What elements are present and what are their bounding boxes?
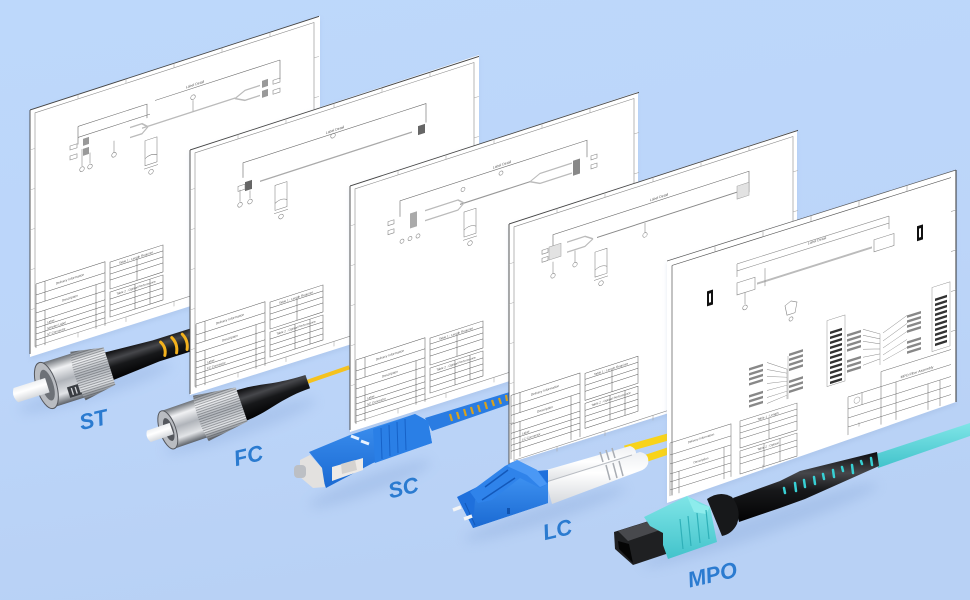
connector: LC <box>453 437 668 549</box>
drawing sheet: MPO: Description <box>694 456 709 465</box>
black striped pin columns <box>830 295 947 384</box>
window <box>332 458 363 481</box>
label: SC: SC <box>386 472 422 503</box>
drawing sheet: FC: Table 2 : Optical Performance <box>276 319 316 336</box>
fiber cable schematic: MPO <box>737 214 894 338</box>
drawing sheet: LC: Description <box>537 405 553 414</box>
drawing sheet: MPO: Table 1 : Length <box>757 411 779 422</box>
drawing sheet: SC <box>350 92 639 435</box>
drawing sheet: SC: Table 2 : Optical Performance <box>436 355 476 372</box>
drawing sheet: FC: Description <box>222 333 238 343</box>
knurled nut <box>191 382 249 442</box>
drawing sheet: LC: Label <box>522 429 530 436</box>
black front housing <box>614 520 672 565</box>
drawing sheet: SC: Delivery Information <box>376 348 404 362</box>
white boots <box>543 446 636 486</box>
drawing sheet: LC: Label Detail <box>650 192 668 202</box>
strain relief with yellow ridges <box>425 392 510 431</box>
end-face icons <box>707 290 713 306</box>
label: LC: LC <box>540 514 575 545</box>
drawing sheet: ST: Label Detail <box>186 80 204 90</box>
metal barrel <box>159 398 212 449</box>
title block <box>670 350 951 496</box>
white ferrule <box>11 378 50 403</box>
fiber cable schematic: ST <box>70 60 280 175</box>
drawing sheet: LC <box>509 130 798 468</box>
connector: FC <box>139 345 357 462</box>
drawing sheet: MPO: MPO Fiber Assembly <box>901 365 934 379</box>
drawing sheet: ST: ST Connector <box>47 327 65 336</box>
white marks <box>351 436 369 444</box>
blue body <box>457 470 548 528</box>
drawing sheet: MPO <box>667 170 956 506</box>
fiber cable schematic: LC <box>542 171 749 282</box>
fiber cable schematic: SC <box>388 137 597 248</box>
label: ST: ST <box>77 404 111 435</box>
knurled nut <box>67 342 117 401</box>
drawing sheet: ST: Table 1 : Length Requires <box>119 250 153 265</box>
blue housing <box>309 414 432 488</box>
drawing sheet: FC: Label <box>207 358 215 364</box>
drawing sheet: ST: Label <box>47 318 55 324</box>
drawing sheet: SC: SC Connector <box>367 396 386 406</box>
drawing sheet: ST: Description <box>62 293 78 303</box>
fiber cable schematic: FC <box>238 103 426 208</box>
front post <box>294 465 306 478</box>
drawing sheet: SC: Table 1 : Length Requires <box>439 326 473 341</box>
white ferrule <box>145 423 174 443</box>
black boot <box>233 367 313 422</box>
teal fiber cable <box>876 423 970 468</box>
drawing sheet: LC: Table 2 : Optical Performance <box>591 391 631 407</box>
drawing sheet: FC: Table 1 : Length Requires <box>279 290 313 305</box>
drawing sheet: SC: Label Detail <box>493 160 511 170</box>
connector: MPO <box>614 423 970 576</box>
connector: SC <box>294 392 510 515</box>
teal shell <box>644 496 717 559</box>
yellow fiber cable <box>305 365 350 384</box>
yellow duplex cables <box>625 437 668 461</box>
drawing sheet: FC: Delivery Information <box>216 312 244 326</box>
drawing sheet: MPO: Delivery Information <box>688 432 715 444</box>
drawing sheet: LC: Delivery Information <box>531 384 559 397</box>
drawing sheet: MPO: Label Detail <box>808 236 826 246</box>
drawing sheet: ST <box>30 16 320 360</box>
metal barrel <box>37 352 90 408</box>
boot with yellow strain relief <box>102 325 201 381</box>
drawing sheet: FC <box>190 55 479 398</box>
white front housing <box>300 455 325 488</box>
label: MPO: MPO <box>685 557 740 593</box>
drawing sheet: MPO: Table 2 : Optical <box>757 441 779 452</box>
connector: ST <box>6 314 204 421</box>
drawing sheet: ST: Table 2 : Optical Performance <box>116 279 156 296</box>
drawing sheet: LC: LC Connector <box>522 432 540 442</box>
drawing sheet: FC: FC Connector <box>207 361 226 370</box>
drawing sheet: SC: Label <box>367 394 375 400</box>
fan-out wiring tables <box>767 282 950 406</box>
drawing sheet: ST: Delivery Information <box>56 272 84 286</box>
white pins <box>453 507 472 519</box>
drawing sheet: LC: Table 1 : Length Requires <box>594 361 628 376</box>
drawing sheet: SC: Description <box>382 369 398 379</box>
drawing sheet: ST: Simplex Label <box>47 320 66 330</box>
black ribbed boot <box>733 452 879 522</box>
drawing sheet: FC: Label Detail <box>326 125 344 135</box>
latch <box>470 460 548 503</box>
label: FC: FC <box>231 440 266 471</box>
rear black clamp <box>707 494 739 536</box>
